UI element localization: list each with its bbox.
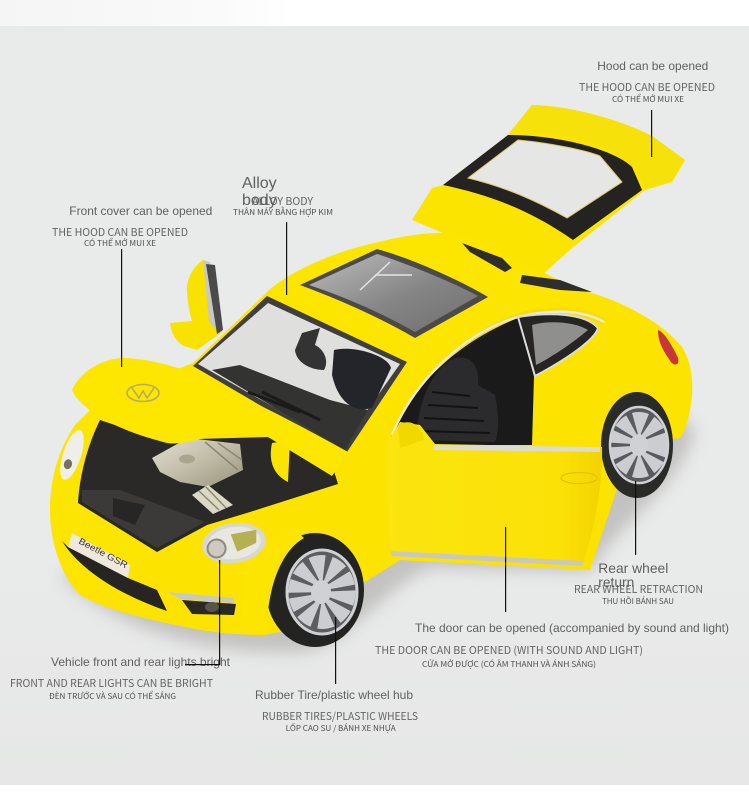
door handle <box>561 472 597 484</box>
rear highlight band above door opening <box>395 311 604 435</box>
callout: hatch: Hood can be opened <box>597 59 708 73</box>
callout: rear wheel: return <box>598 574 634 590</box>
right headlight <box>200 519 268 567</box>
open hood <box>72 358 348 476</box>
car model illustration <box>50 105 692 647</box>
hatch window glass <box>468 140 622 218</box>
callout: hatch: CÓ THỂ MỞ MUI XE <box>612 93 684 105</box>
left headlight <box>55 427 89 483</box>
callout: tyres <box>255 617 418 734</box>
callout: alloy body <box>233 175 333 295</box>
gap between hatch and roof <box>462 243 592 292</box>
engine intake <box>192 485 233 514</box>
callout: hatch: THE HOOD CAN BE OPENED <box>579 80 715 95</box>
chrome arch <box>392 312 604 435</box>
icon: VW badge <box>127 384 159 402</box>
callout: tyres: RUBBER TIRES/PLASTIC WHEELS <box>262 709 418 724</box>
callout: door <box>375 527 729 670</box>
callout: rear wheel: Rear wheel <box>598 560 668 576</box>
far side door, open <box>170 260 223 350</box>
number plate <box>68 533 130 578</box>
fog lamp <box>168 592 236 615</box>
rear view mirror <box>295 328 326 370</box>
callout: alloy body: body <box>242 192 277 209</box>
yellow hood strut <box>271 440 290 482</box>
windshield <box>193 296 407 455</box>
callout: rear wheel: REAR WHEEL RETRACTION <box>574 582 703 597</box>
front fender over tyre <box>240 525 304 634</box>
callout: alloy body: Alloy <box>242 175 277 192</box>
callout: tyres: Rubber Tire/plastic wheel hub <box>255 688 413 702</box>
callout: front cover <box>52 204 212 367</box>
sunroof <box>300 249 488 338</box>
callout: front cover: Front cover can be opened <box>69 204 212 218</box>
callout: alloy body: ALLOY BODY <box>252 194 313 209</box>
callout: front cover: CÓ THỂ MỞ MUI XE <box>84 237 156 249</box>
callout: door: CỬA MỞ ĐƯỢC (CÓ ÂM THANH VÀ ÁNH SÁNG) <box>422 659 596 670</box>
callout: tyres: LỐP CAO SU / BÁNH XE NHỰA <box>286 722 396 734</box>
door opening interior <box>388 312 604 445</box>
door mirror <box>398 422 424 448</box>
callout: rear wheel <box>574 481 703 607</box>
callout: alloy body: THÂN MÁY BẰNG HỢP KIM <box>233 206 333 218</box>
callout: lights: ĐÈN TRƯỚC VÀ SAU CÓ THỂ SÁNG <box>49 690 176 702</box>
number plate: Beetle GSR <box>77 536 130 570</box>
callout: lights <box>10 560 231 702</box>
callout: door: THE DOOR CAN BE OPENED (WITH SOUND AND LIGHT) <box>375 643 643 658</box>
rear tyre and rim <box>601 392 673 498</box>
lower grille <box>62 541 167 611</box>
callout: hatch <box>579 59 715 157</box>
tail light <box>658 330 678 365</box>
main car body <box>50 233 692 635</box>
car shadow <box>60 400 695 652</box>
rear quarter window <box>518 314 598 376</box>
silver engine <box>152 438 243 487</box>
callout: rear wheel: THU HỒI BÁNH SAU <box>602 595 674 607</box>
callout: lights: FRONT AND REAR LIGHTS CAN BE BRIGHT <box>10 676 213 691</box>
open front door <box>387 422 602 566</box>
raised hatch with rear window <box>412 105 685 275</box>
dashboard and seats <box>212 365 368 450</box>
callout: door: The door can be opened (accompanied by sound and light) <box>415 621 729 635</box>
engine bay <box>78 420 338 552</box>
front panel in bay <box>82 490 205 548</box>
callout: front cover: THE HOOD CAN BE OPENED <box>52 225 188 240</box>
front tyre and rim <box>266 533 364 647</box>
black seat <box>415 357 498 442</box>
callout: lights: Vehicle front and rear lights bright <box>51 655 231 669</box>
hatch black glass frame <box>443 135 642 240</box>
